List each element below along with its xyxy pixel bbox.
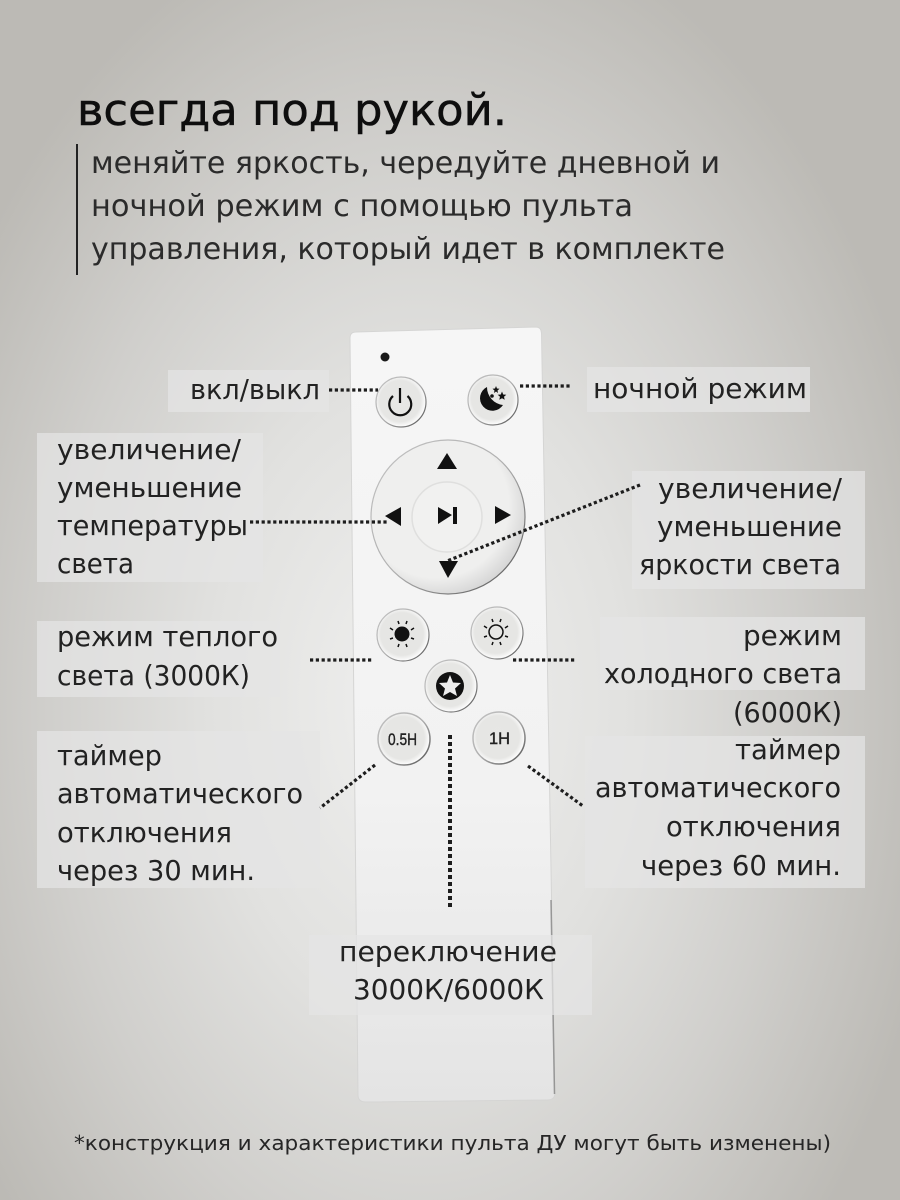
- label: colour temperature: температуры: [57, 510, 248, 542]
- label: 60 minute timer: отключения: [666, 811, 841, 843]
- intro text block: меняйте яркость, чередуйте дневной и: [91, 146, 720, 181]
- label: colour temperature: уменьшение: [57, 472, 242, 504]
- label: 3000K/6000K switch: 3000К/6000К: [353, 974, 544, 1006]
- label: 30 minute timer: [37, 731, 320, 888]
- label: brightness: яркости света: [639, 549, 841, 581]
- label: night mode: [587, 367, 810, 412]
- indicator light: [380, 352, 390, 362]
- label: 60 minute timer: таймер: [735, 734, 841, 766]
- label: colour temperature: света: [57, 548, 134, 580]
- remote control: [350, 327, 555, 1102]
- down arrow: [439, 561, 458, 578]
- play-pause glyph: [438, 507, 457, 524]
- label: 3000K/6000K switch: переключение: [339, 936, 557, 968]
- label: warm light: [37, 621, 280, 697]
- footnote: *конструкция и характеристики пульта ДУ могут быть изменены): [74, 1131, 831, 1155]
- power button: [376, 377, 426, 427]
- label: colour temperature: [37, 433, 263, 582]
- 60 minute timer button: 1H: [489, 729, 510, 748]
- label: cool light: холодного света: [604, 658, 842, 690]
- label: 60 minute timer: через 60 мин.: [641, 850, 841, 882]
- 30 minute timer button: 0.5H: [388, 730, 417, 749]
- up arrow: [437, 453, 457, 469]
- leader lines: [250, 386, 640, 910]
- 30 minute timer button: [378, 713, 430, 765]
- remote right edge shadow: [551, 900, 554, 1094]
- left arrow: [385, 507, 401, 526]
- label: on/off: [168, 370, 329, 412]
- direction pad: [371, 440, 525, 594]
- label: 30 minute timer: отключения: [57, 817, 232, 849]
- label: cool light: (6000К): [733, 697, 842, 729]
- label: brightness: увеличение/: [658, 473, 843, 505]
- title: всегда под рукой.: [77, 85, 507, 136]
- label: 60 minute timer: автоматического: [595, 772, 841, 804]
- night mode button: [468, 375, 518, 425]
- label: 60 minute timer: [585, 734, 865, 888]
- label: night mode: ночной режим: [593, 373, 807, 405]
- intro text block: ночной режим с помощью пульта: [91, 189, 633, 224]
- label: cool light: режим: [743, 620, 842, 652]
- toggle button: [425, 660, 477, 712]
- cool light button: [471, 607, 523, 659]
- 60 minute timer button: [473, 712, 525, 764]
- label: on/off: вкл/выкл: [190, 374, 320, 406]
- label: 30 minute timer: автоматического: [57, 778, 303, 810]
- label: 30 minute timer: через 30 мин.: [57, 855, 255, 887]
- intro text block: управления, который идет в комплекте: [91, 232, 725, 267]
- right arrow: [495, 506, 511, 524]
- label: brightness: [632, 471, 865, 589]
- remote body: [350, 327, 555, 1102]
- label: colour temperature: увеличение/: [57, 434, 242, 466]
- intro text block: [76, 144, 725, 275]
- label: cool light: [600, 617, 865, 729]
- label: 3000K/6000K switch: [309, 935, 592, 1015]
- warm light button: [377, 609, 429, 661]
- label: warm light: режим теплого: [57, 621, 278, 653]
- label: 30 minute timer: таймер: [57, 740, 162, 772]
- label: brightness: уменьшение: [657, 511, 842, 543]
- label: warm light: света (3000К): [57, 660, 250, 692]
